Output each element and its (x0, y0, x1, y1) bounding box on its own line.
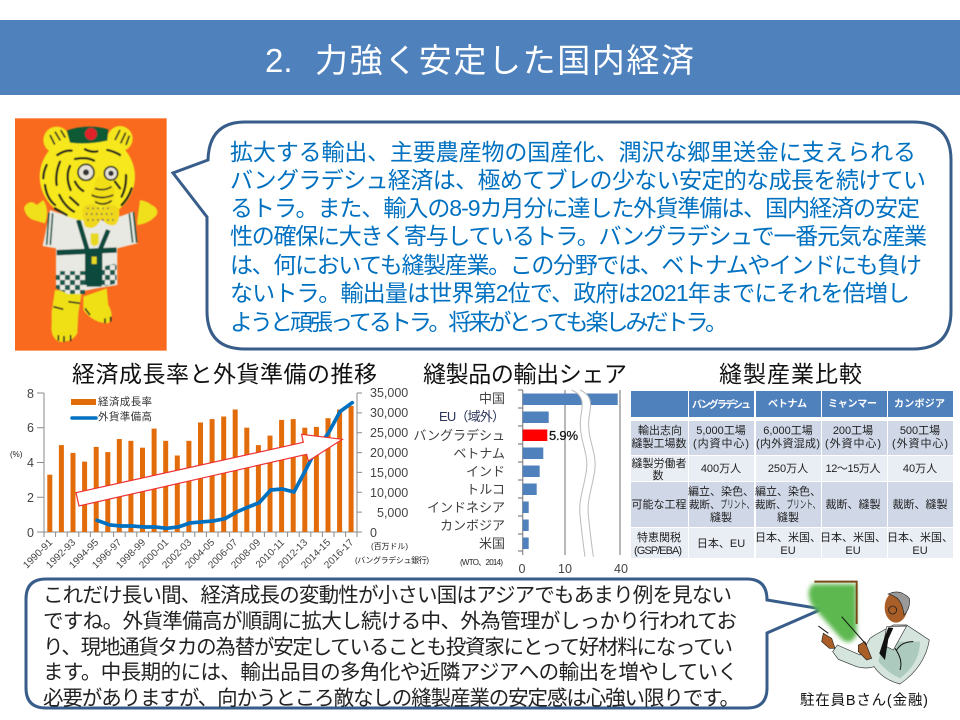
year labels: 2002-03 (160, 537, 194, 571)
title: 2. (265, 42, 293, 79)
row: preferential tariffs: 日本、米国、 (887, 530, 953, 544)
source note: (WTO、2014) (460, 558, 503, 567)
speech bubble: mascot commentary: は、何においても縫製産業。この分野では、ベトナムやインドにも負け (230, 252, 922, 278)
year labels: 2016-17 (322, 537, 356, 571)
title: 力強く安定した国内経済 (315, 42, 694, 79)
right axis labels: 25,000 (370, 426, 408, 440)
legend (71, 395, 152, 423)
year labels: 1990-91 (21, 537, 55, 571)
row: possible processes: 編立、染色、 (688, 484, 754, 498)
x axis labels: 10 (558, 562, 572, 576)
heading: garment industry comparison: 縫製産業比較 (719, 361, 862, 387)
row: preferential tariffs: EU (912, 545, 928, 557)
left axis labels: 8 (27, 387, 34, 401)
chart: economic growth and foreign reserves (10, 386, 429, 571)
row: garment workers: 40万人 (903, 463, 937, 475)
row: garment workers: 数 (652, 469, 664, 482)
year labels: 2000-01 (137, 537, 171, 571)
speech bubble: resident commentary: これだけ長い間、経済成長の変動性が小さい国はアジアでもあまり例を見ない (43, 584, 732, 607)
left axis labels: 4 (27, 456, 34, 470)
row: possible processes (632, 484, 948, 524)
caption: presenter name: 駐在員Bさん(金融) (800, 692, 928, 709)
row: export factories: (内資中心) (693, 436, 749, 450)
icon: presenter at board (809, 582, 929, 684)
country labels: バングラデシュ (413, 428, 505, 443)
row: possible processes: 編立、染色、 (755, 484, 821, 498)
mascot: tiger character (15, 118, 167, 351)
speech bubble: mascot commentary: バングラデシュ経済は、極めてブレの少ない安定的な成長を続けてい (230, 167, 926, 193)
unit and source notes (10, 450, 429, 565)
country labels: ベトナム (453, 446, 505, 461)
speech bubble: resident commentary: ですね。外貨準備高が順調に拡大し続ける中、外為管理がしっかり行われてお (43, 610, 737, 633)
row: possible processes: プリント、 (786, 498, 819, 510)
row: possible processes: 可能な工程 (632, 497, 686, 511)
country labels: EU（域外） (439, 409, 505, 424)
table: garment industry comparison (631, 391, 953, 558)
row: garment workers: 400万人 (701, 463, 741, 475)
right axis labels: 5,000 (377, 506, 408, 520)
row: garment workers: 12～15万人 (826, 463, 880, 475)
row: possible processes: 裁断、縫製 (892, 497, 948, 511)
row: possible processes: 裁断、 (689, 498, 720, 511)
row: preferential tariffs: EU (780, 545, 796, 557)
row: preferential tariffs: 日本、米国、 (755, 530, 821, 544)
row: garment workers: 縫製労働者 (632, 456, 686, 470)
legend: 外貨準備高 (98, 410, 152, 423)
country labels: 中国 (479, 391, 505, 406)
row: possible processes: 裁断、 (755, 498, 786, 511)
row: preferential tariffs: 日本、米国、 (820, 530, 886, 544)
value label: 5.9%: 5.9% (549, 428, 578, 443)
country labels: カンボジア (440, 518, 505, 533)
year labels: 2006-07 (206, 537, 240, 571)
row: possible processes: 縫製 (777, 510, 799, 524)
speech bubble: mascot commentary: 性の確保に大きく寄与しているトラ。バングラデシュで一番元気な産業 (230, 223, 927, 249)
speech bubble: resident commentary: 必要がありますが、向かうところ敵なしの縫製産業の安定感は心強い限りです。 (43, 687, 740, 710)
year labels: 1994-95 (67, 537, 101, 571)
year labels: 2014-15 (299, 537, 333, 571)
right axis labels: 20,000 (370, 446, 408, 460)
right axis labels: 15,000 (370, 466, 408, 480)
table header row: ミャンマー (828, 399, 877, 410)
unit and source notes: (バングラデシュ銀行) (355, 555, 429, 565)
country labels: インドネシア (427, 500, 505, 515)
row: preferential tariffs: 日本、EU (697, 536, 745, 550)
country labels (413, 391, 505, 551)
year labels: 1998-99 (114, 537, 148, 571)
table header row: バングラデシュ (692, 398, 751, 411)
x axis labels (519, 562, 628, 576)
unit and source notes: (百万ドル) (371, 542, 408, 551)
speech bubble: mascot commentary: ようと頑張ってるトラ。将来がとっても楽しみだトラ。 (230, 309, 728, 335)
speech bubble: resident commentary (26, 579, 822, 710)
country labels: インド (466, 464, 505, 479)
bars: export share by country (523, 394, 618, 549)
row: export factories: (内外資混成) (756, 436, 820, 450)
row: preferential tariffs: (GSP/EBA) (634, 545, 682, 557)
axis break (572, 390, 595, 557)
speech bubble: mascot commentary: るトラ。また、輸入の8-9カ月分に達した外貨準備は、国内経済の安定 (230, 195, 920, 221)
row: export factories: 縫製工場数 (632, 436, 686, 450)
row: export factories: (外資中心) (825, 437, 881, 450)
row: possible processes: 縫製 (710, 510, 732, 524)
speech bubble: resident commentary: ます。中長期的には、輸出品目の多角化や近隣アジアへの輸出を増やしていく (43, 661, 738, 684)
row: export factories: (外資中心) (892, 437, 948, 450)
row: export factories: 200工場 (833, 424, 873, 437)
year labels: 2010-11 (254, 537, 287, 571)
row: preferential tariffs: 特恵関税 (637, 530, 681, 544)
speech bubble: mascot commentary: 拡大する輸出、主要農産物の国産化、潤沢な郷里送金に支えられる (230, 139, 916, 165)
chart: garment export share (413, 390, 628, 576)
country labels: 米国 (479, 536, 505, 551)
row: export factories (632, 423, 948, 450)
arrow: upward trend (76, 434, 342, 506)
x axis labels: 0 (519, 562, 526, 576)
left axis labels (27, 387, 34, 540)
row: possible processes: 裁断、縫製 (826, 497, 880, 511)
year labels (21, 537, 356, 571)
row: export factories: 5,000工場 (696, 424, 746, 437)
row: export factories: 500工場 (900, 424, 940, 437)
year labels: 2004-05 (183, 537, 217, 571)
right axis labels: 35,000 (370, 386, 408, 400)
bars: growth rate (47, 406, 354, 532)
row: possible processes: プリント、 (720, 498, 753, 510)
table row backgrounds (631, 421, 953, 558)
highlight bar: Bangladesh (523, 430, 547, 441)
left axis labels: 6 (27, 421, 34, 435)
left axis labels: 2 (27, 491, 34, 505)
right axis labels (370, 386, 408, 540)
year labels: 2012-13 (276, 537, 310, 571)
heading: growth and reserves chart: 経済成長率と外貨準備の推移 (72, 361, 377, 387)
heading: export share chart: 縫製品の輸出シェア (423, 361, 627, 387)
line: foreign reserves (97, 403, 352, 528)
row: export factories: 輸出志向 (638, 423, 682, 437)
year labels: 1996-97 (90, 537, 124, 571)
x axis labels: 40 (614, 562, 628, 576)
unit and source notes: (%) (10, 450, 23, 459)
speech bubble: resident commentary: り、現地通貨タカの為替が安定していることも投資家にとって好材料になってい (43, 636, 733, 659)
year labels: 1992-93 (44, 537, 78, 571)
row: garment workers: 250万人 (768, 463, 808, 475)
table header row: カンボジア (894, 398, 945, 410)
right axis labels: 30,000 (370, 406, 408, 420)
table header row: ベトナム (768, 398, 807, 410)
header banner (0, 20, 960, 95)
left axis labels: 0 (27, 526, 34, 540)
table header row (631, 391, 953, 417)
year labels: 2008-09 (229, 537, 263, 571)
row: garment workers (632, 456, 937, 482)
row: export factories: 6,000工場 (763, 424, 813, 437)
country labels: トルコ (466, 482, 505, 497)
speech bubble: mascot commentary: ないトラ。輸出量は世界第2位で、政府は2021年までにそれを倍増し (230, 280, 910, 306)
right axis labels: 0 (370, 526, 377, 540)
speech bubble: mascot commentary (173, 122, 951, 349)
legend: 経済成長率 (98, 395, 152, 408)
row: preferential tariffs (634, 530, 953, 557)
right axis labels: 10,000 (370, 486, 408, 500)
row: preferential tariffs: EU (845, 545, 861, 557)
